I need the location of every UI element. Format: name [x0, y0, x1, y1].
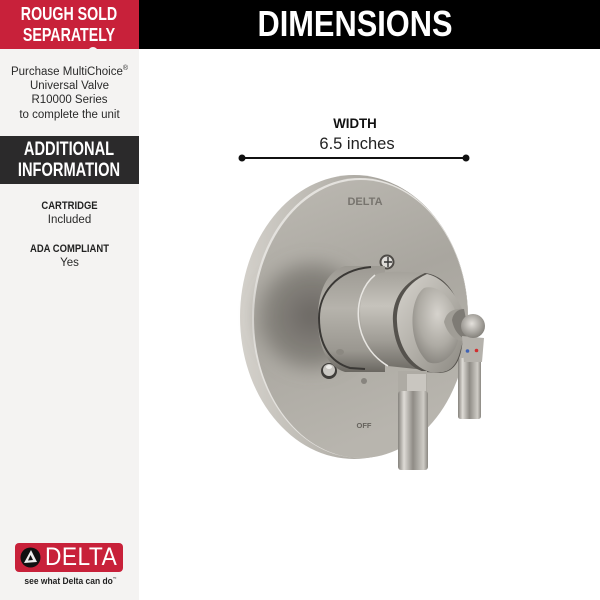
wall plate	[240, 175, 468, 459]
ada label: ADA COMPLIANT	[30, 243, 109, 255]
cartridge spec	[41, 200, 98, 226]
title: DIMENSIONS	[258, 3, 452, 44]
width dimension line	[238, 154, 470, 162]
plate brand text: DELTA	[347, 196, 383, 208]
cartridge label: CARTRIDGE	[41, 200, 98, 212]
ada value: Yes	[60, 257, 79, 269]
front lever	[398, 371, 428, 470]
purchase text block: Purchase MultiChoice®	[11, 65, 128, 78]
top black banner with title	[139, 0, 600, 49]
badge text: SEPARATELY	[23, 24, 115, 44]
handle knob	[461, 314, 485, 362]
heading text: INFORMATION	[18, 160, 120, 180]
indicator mark	[361, 378, 367, 384]
logo wordmark: DELTA	[45, 543, 117, 571]
plate shadow	[250, 254, 374, 378]
badge notch	[88, 47, 98, 52]
ada compliant spec	[30, 243, 109, 269]
heading text: ADDITIONAL	[24, 139, 114, 160]
logo tagline: see what Delta can do™	[24, 576, 117, 586]
purchase text block: R10000 Series	[31, 94, 108, 106]
badge text: ROUGH SOLD	[21, 4, 117, 24]
red badge: rough sold separately	[0, 0, 139, 49]
width value: 6.5 inches	[319, 135, 395, 153]
width label: WIDTH	[333, 115, 377, 131]
purchase text block: to complete the unit	[19, 109, 120, 121]
logo mark	[20, 548, 40, 568]
valve dome	[393, 273, 470, 373]
purchase text block: Universal Valve	[30, 80, 109, 92]
off marking: OFF	[356, 421, 372, 430]
top screw	[380, 254, 394, 270]
badge text	[21, 4, 117, 44]
delta logo	[15, 543, 123, 586]
cartridge value: Included	[48, 214, 91, 226]
product image: shower valve trim	[240, 175, 485, 470]
heading text	[18, 139, 120, 180]
logo red badge	[15, 543, 123, 572]
sidebar panel	[0, 49, 139, 600]
valve body	[318, 266, 425, 372]
rear lever	[458, 358, 481, 419]
bottom screw	[321, 363, 337, 379]
additional information heading	[0, 136, 139, 184]
purchase text block	[11, 64, 128, 121]
